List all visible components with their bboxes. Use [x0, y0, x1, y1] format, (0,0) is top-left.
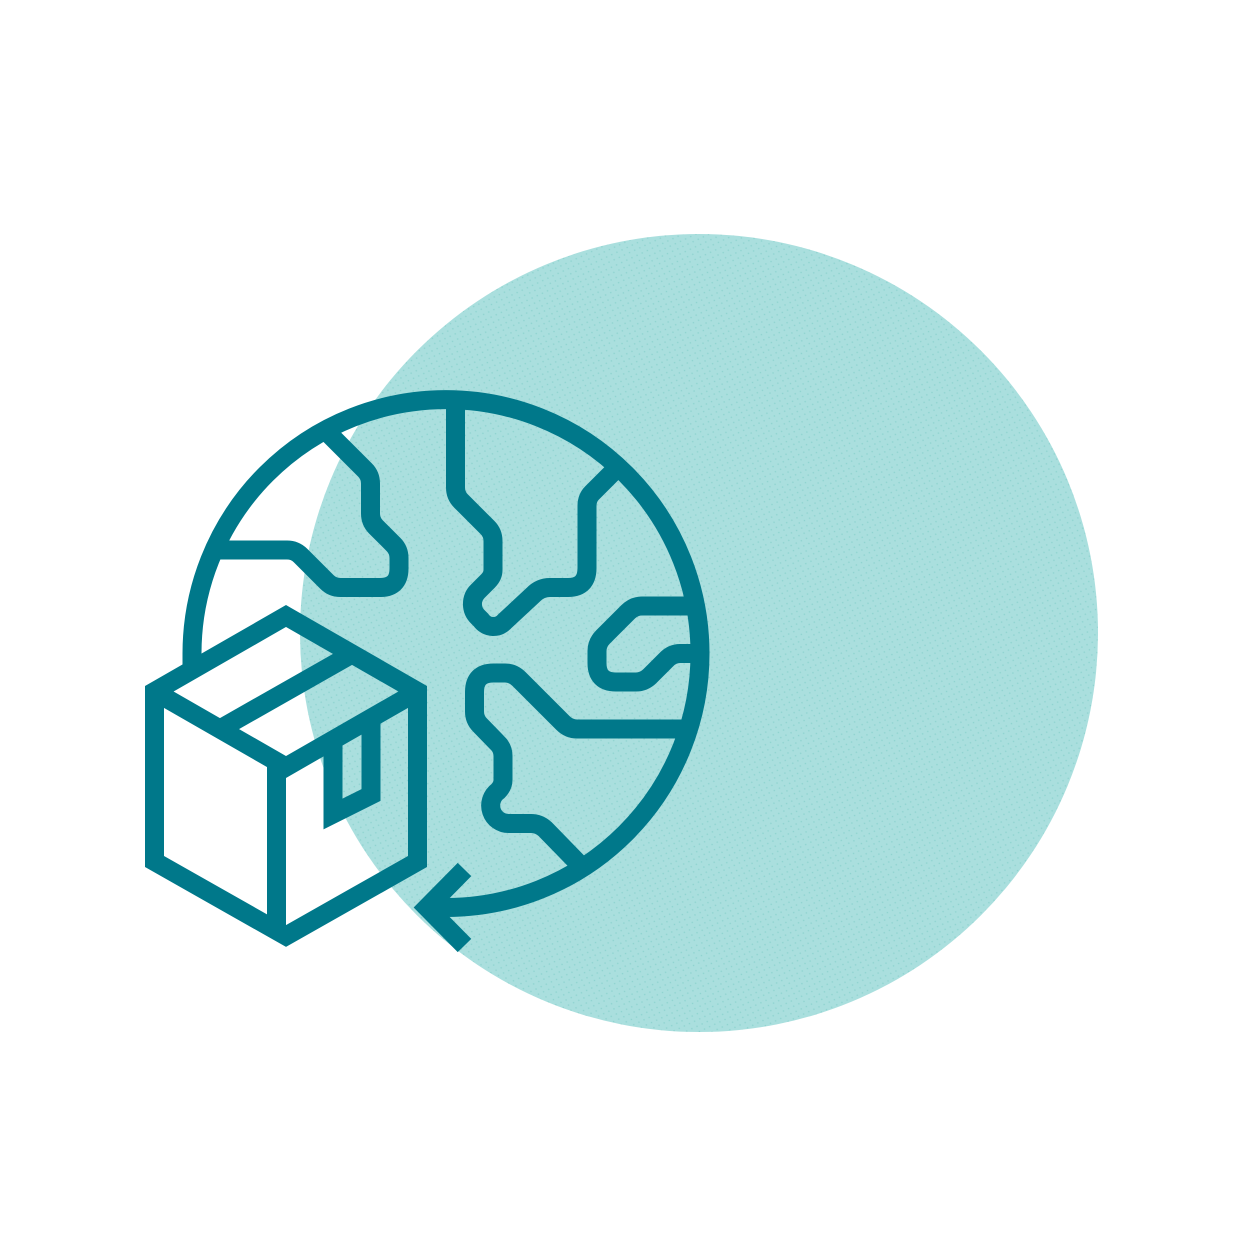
icon: central continent [456, 400, 618, 627]
box outline [154, 616, 418, 936]
box label [333, 722, 371, 814]
icon: cardboard box [154, 616, 418, 936]
icon: southern continent [474, 673, 688, 868]
box inner edges [154, 692, 418, 931]
icon: globe outline with arrow tail [192, 400, 700, 908]
background circle [300, 234, 1098, 1032]
icon: east island [597, 606, 695, 682]
box tape on lid [220, 654, 352, 729]
icon: north-west continent [214, 433, 399, 588]
icon: globe with shipping box [154, 400, 700, 946]
icon: arrow head [427, 870, 464, 946]
